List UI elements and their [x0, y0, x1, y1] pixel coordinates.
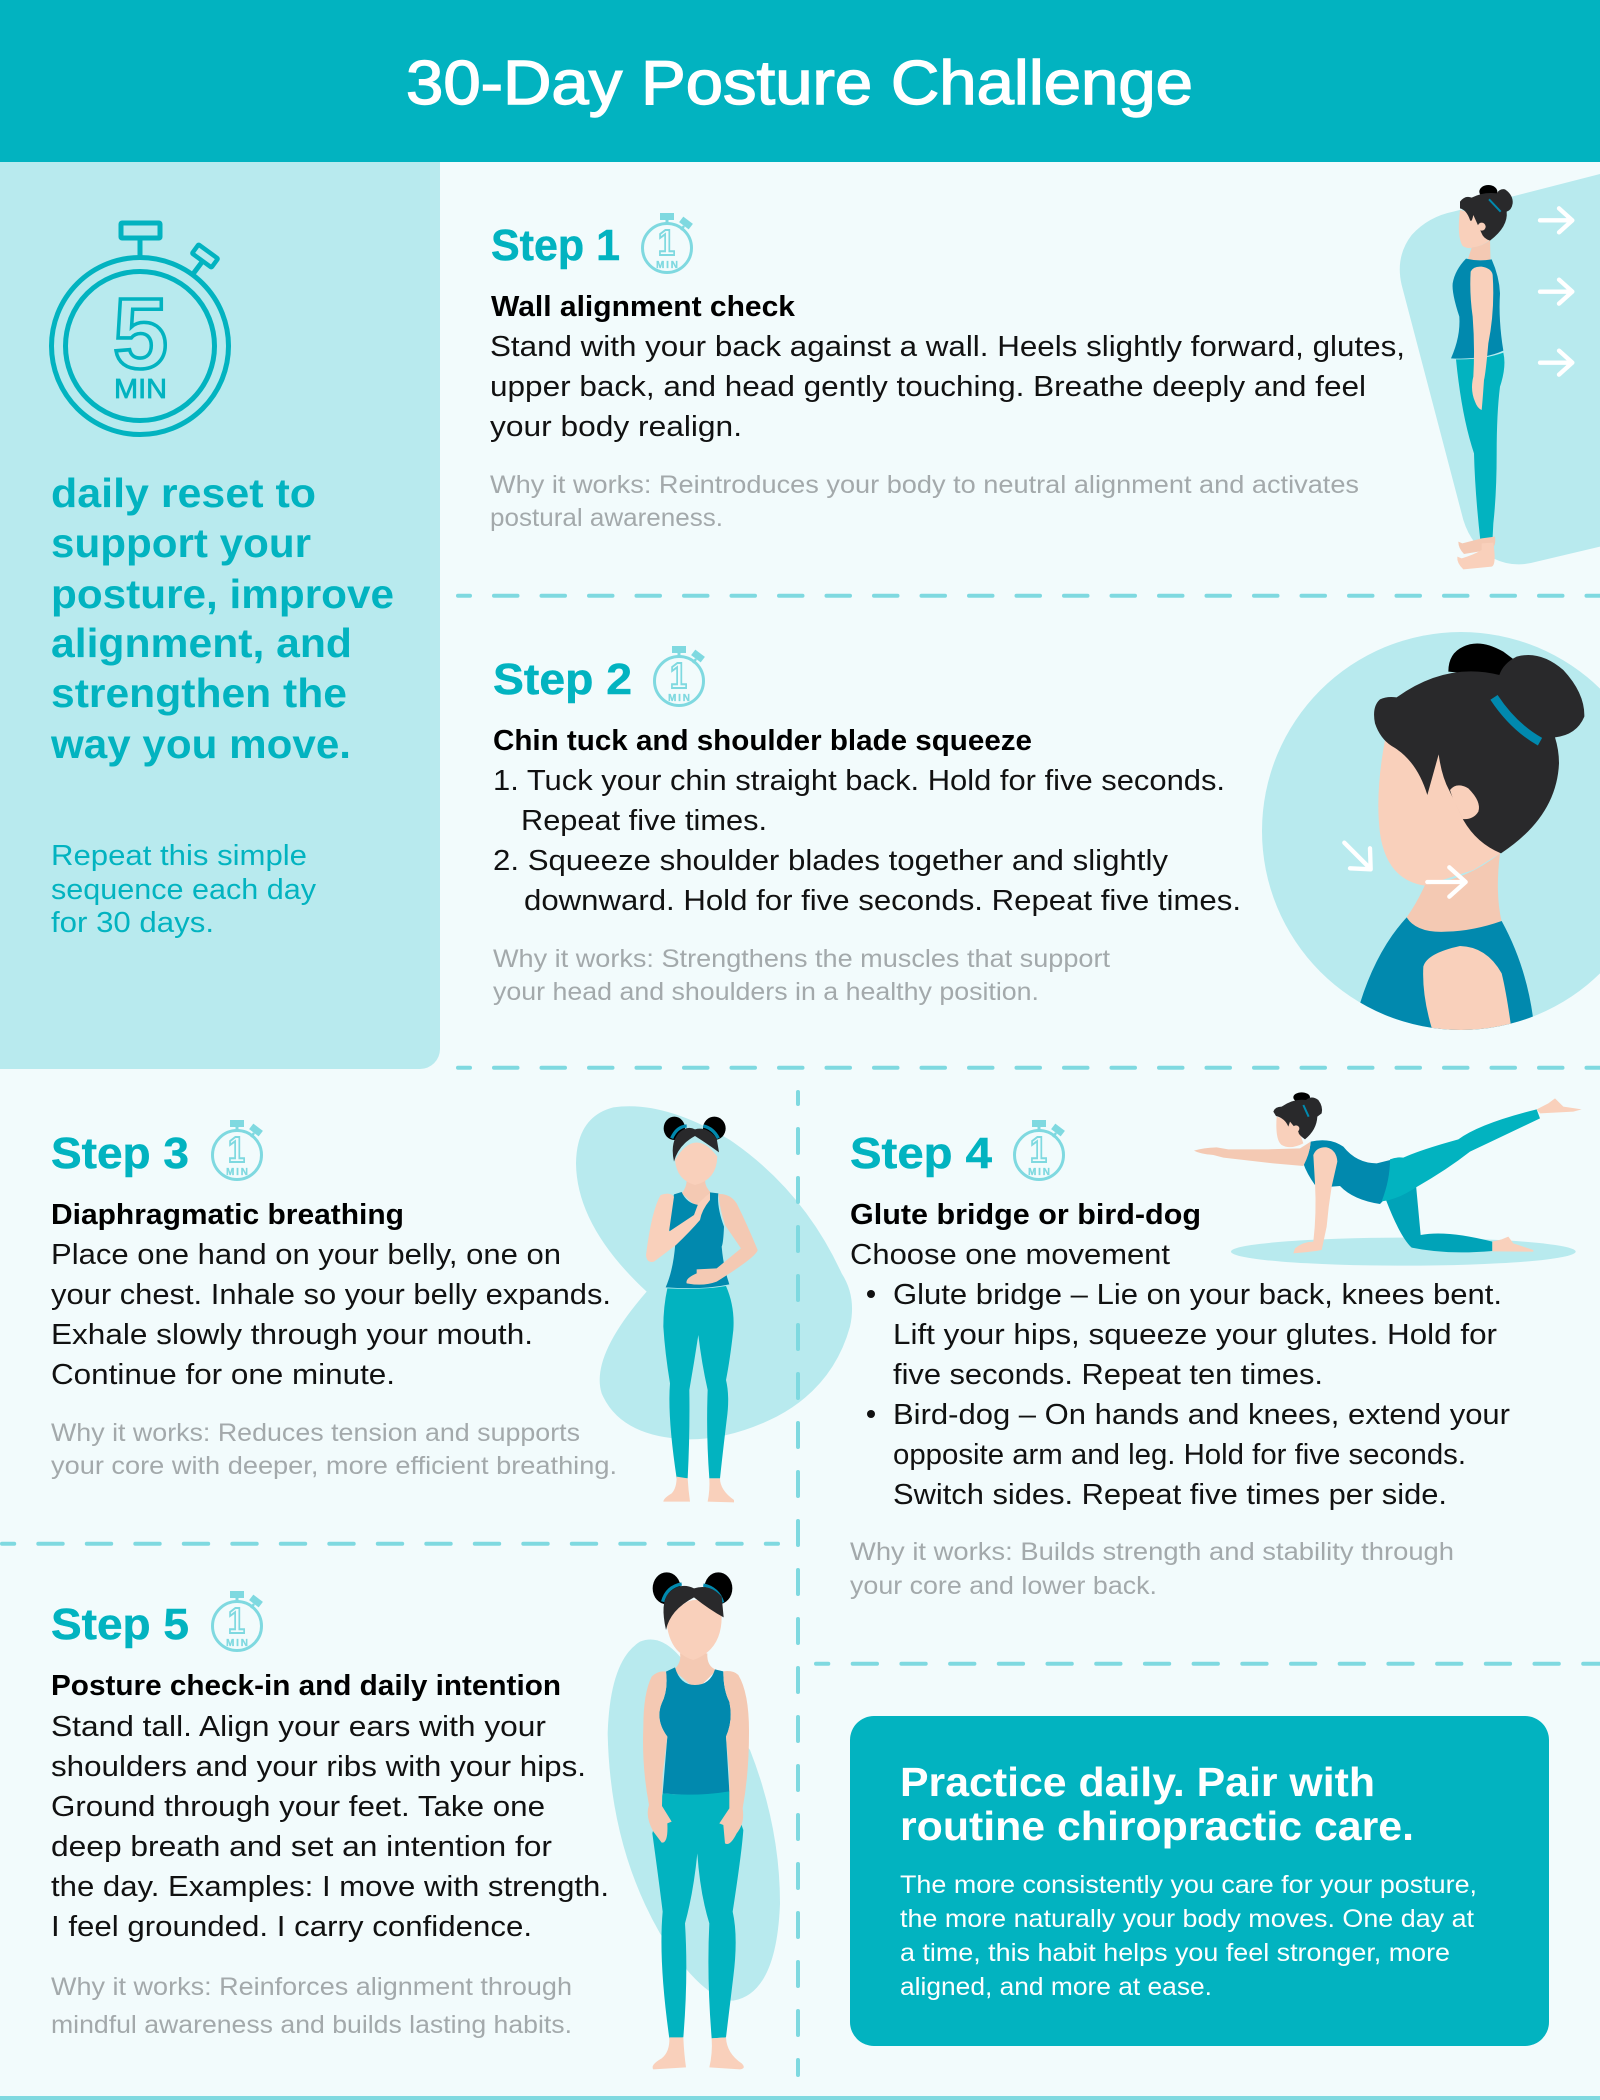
step 4 text: Bird-dog – On hands and knees, extend your	[893, 1399, 1510, 1431]
icon: 1 minute stopwatch: 1	[1030, 1129, 1047, 1170]
intro statement: support your	[51, 520, 311, 566]
panel: step 4	[850, 1092, 1582, 1600]
illustration: head and neck chin tuck	[1262, 632, 1600, 1053]
intro statement: daily reset to	[51, 470, 316, 516]
step 2 text: 2. Squeeze shoulder blades together and slightly	[493, 845, 1169, 877]
intro statement: alignment, and	[51, 620, 352, 666]
illustration: bird-dog pose	[1194, 1092, 1582, 1266]
icon: 1 minute stopwatch: 1	[228, 1600, 245, 1641]
step 5 text: Posture check-in and daily intention	[51, 1670, 561, 1702]
icon: 1 minute stopwatch	[212, 1591, 263, 1650]
repeat note: for 30 days.	[51, 907, 214, 939]
step 5 text: shoulders and your ribs with your hips.	[51, 1751, 586, 1783]
callout: practice daily: aligned, and more at ease.	[900, 1973, 1212, 2001]
icon: 1 minute stopwatch: 1	[658, 222, 675, 263]
header banner: 30-Day Posture Challenge	[406, 49, 1193, 118]
panel: step 3	[51, 1106, 852, 1502]
step 3 text: Diaphragmatic breathing	[51, 1199, 404, 1231]
step 2 text: downward. Hold for five seconds. Repeat five times.	[524, 885, 1241, 917]
icon: 1 minute stopwatch: MIN	[226, 1167, 248, 1178]
step 5 text	[51, 1670, 609, 2039]
icon: 1 minute stopwatch	[654, 646, 705, 706]
step 4 heading: Step 4	[850, 1129, 993, 1178]
step 4 text: Why it works: Builds strength and stability through	[850, 1538, 1454, 1566]
step 3 text: Exhale slowly through your mouth.	[51, 1319, 533, 1351]
callout: practice daily	[850, 1716, 1549, 2046]
step 2 text: 1. Tuck your chin straight back. Hold for five seconds.	[493, 765, 1225, 797]
step 3 text: your chest. Inhale so your belly expands.	[51, 1279, 611, 1311]
callout: practice daily: the more naturally your body moves. One day at	[900, 1905, 1474, 1933]
step 4 text: five seconds. Repeat ten times.	[893, 1359, 1323, 1391]
icon: 1 minute stopwatch	[212, 1120, 263, 1180]
callout: practice daily: routine chiropractic care.	[900, 1803, 1414, 1849]
step 4 text: Glute bridge or bird-dog	[850, 1199, 1201, 1231]
illustration: standing posture figure	[608, 1572, 780, 2069]
step 1 text: upper back, and head gently touching. Breathe deeply and feel	[490, 371, 1366, 403]
icon: 1 minute stopwatch: MIN	[1028, 1167, 1050, 1178]
step 1 heading: Step 1	[491, 221, 620, 270]
icon: 1 minute stopwatch	[1014, 1120, 1065, 1180]
step 2 heading: Step 2	[493, 655, 632, 704]
step 5 text: mindful awareness and builds lasting habits.	[51, 2011, 572, 2039]
step 5 text: deep breath and set an intention for	[51, 1831, 552, 1863]
repeat note: sequence each day	[51, 874, 317, 906]
step 4 text: Lift your hips, squeeze your glutes. Hold for	[893, 1319, 1497, 1351]
illustration: standing side view with arrows	[1400, 174, 1600, 569]
panel: step 1	[490, 174, 1600, 569]
illustration: diaphragmatic breathing figure	[576, 1106, 852, 1502]
repeat note: Repeat this simple	[51, 840, 307, 872]
step 1 text: Stand with your back against a wall. Heels slightly forward, glutes,	[490, 331, 1405, 363]
step 4 text: Glute bridge – Lie on your back, knees bent.	[893, 1279, 1502, 1311]
intro statement	[50, 470, 394, 767]
step 2 text: Why it works: Strengthens the muscles that support	[493, 945, 1110, 973]
icon: 1 minute stopwatch: MIN	[656, 260, 678, 271]
header banner	[0, 0, 1600, 162]
step 2 text: your head and shoulders in a healthy position.	[493, 978, 1039, 1006]
step 3 text	[51, 1199, 617, 1480]
step 5 text: Ground through your feet. Take one	[51, 1791, 545, 1823]
step 1 text: Why it works: Reintroduces your body to neutral alignment and activates	[490, 471, 1359, 499]
icon: 5 minute stopwatch: 5	[113, 278, 168, 390]
repeat note	[51, 840, 317, 939]
icon: 1 minute stopwatch	[642, 213, 693, 272]
step 5 text: the day. Examples: I move with strength.	[51, 1871, 609, 1903]
icon: 1 minute stopwatch: 1	[670, 655, 687, 696]
callout: practice daily: The more consistently you care for your posture,	[900, 1871, 1477, 1899]
step 2 text: Repeat five times.	[521, 805, 767, 837]
panel: 5 minute intro	[0, 162, 440, 1069]
step 3 text: your core with deeper, more efficient breathing.	[51, 1452, 617, 1480]
step 5 text: I feel grounded. I carry confidence.	[51, 1911, 532, 1943]
step 3 text: Why it works: Reduces tension and supports	[51, 1419, 580, 1447]
step 5 text: Why it works: Reinforces alignment through	[51, 1973, 572, 2001]
step 2 text: Chin tuck and shoulder blade squeeze	[493, 725, 1032, 757]
step 3 text: Continue for one minute.	[51, 1359, 395, 1391]
icon: 5 minute stopwatch: MIN	[114, 373, 167, 404]
step 4 text: opposite arm and leg. Hold for five seconds.	[893, 1439, 1466, 1471]
intro statement: posture, improve	[51, 571, 394, 617]
step 3 heading: Step 3	[51, 1129, 189, 1178]
panel: step 5	[51, 1572, 780, 2069]
step 2 text	[493, 725, 1241, 1006]
step 5 heading: Step 5	[51, 1600, 189, 1649]
step 3 text: Place one hand on your belly, one on	[51, 1239, 561, 1271]
callout: practice daily: a time, this habit helps you feel stronger, more	[900, 1939, 1450, 1967]
step 1 text	[490, 291, 1405, 532]
step 1 text: postural awareness.	[490, 504, 723, 532]
step 1 text: your body realign.	[490, 411, 742, 443]
callout: practice daily: Practice daily. Pair with	[900, 1759, 1375, 1805]
intro statement: strengthen the	[51, 670, 347, 716]
intro statement: way you move.	[50, 721, 351, 767]
step 1 text: Wall alignment check	[491, 291, 796, 323]
step 4 text: Choose one movement	[850, 1239, 1170, 1271]
icon: 1 minute stopwatch: 1	[228, 1129, 245, 1170]
icon: 5 minute stopwatch	[52, 223, 228, 434]
step 5 text: Stand tall. Align your ears with your	[51, 1711, 546, 1743]
step 4 text	[850, 1199, 1510, 1600]
panel: step 2	[493, 632, 1600, 1053]
step 4 text: Switch sides. Repeat five times per side.	[893, 1479, 1447, 1511]
icon: 1 minute stopwatch: MIN	[226, 1638, 248, 1649]
step 4 text: your core and lower back.	[850, 1572, 1157, 1600]
icon: 1 minute stopwatch: MIN	[668, 693, 690, 704]
